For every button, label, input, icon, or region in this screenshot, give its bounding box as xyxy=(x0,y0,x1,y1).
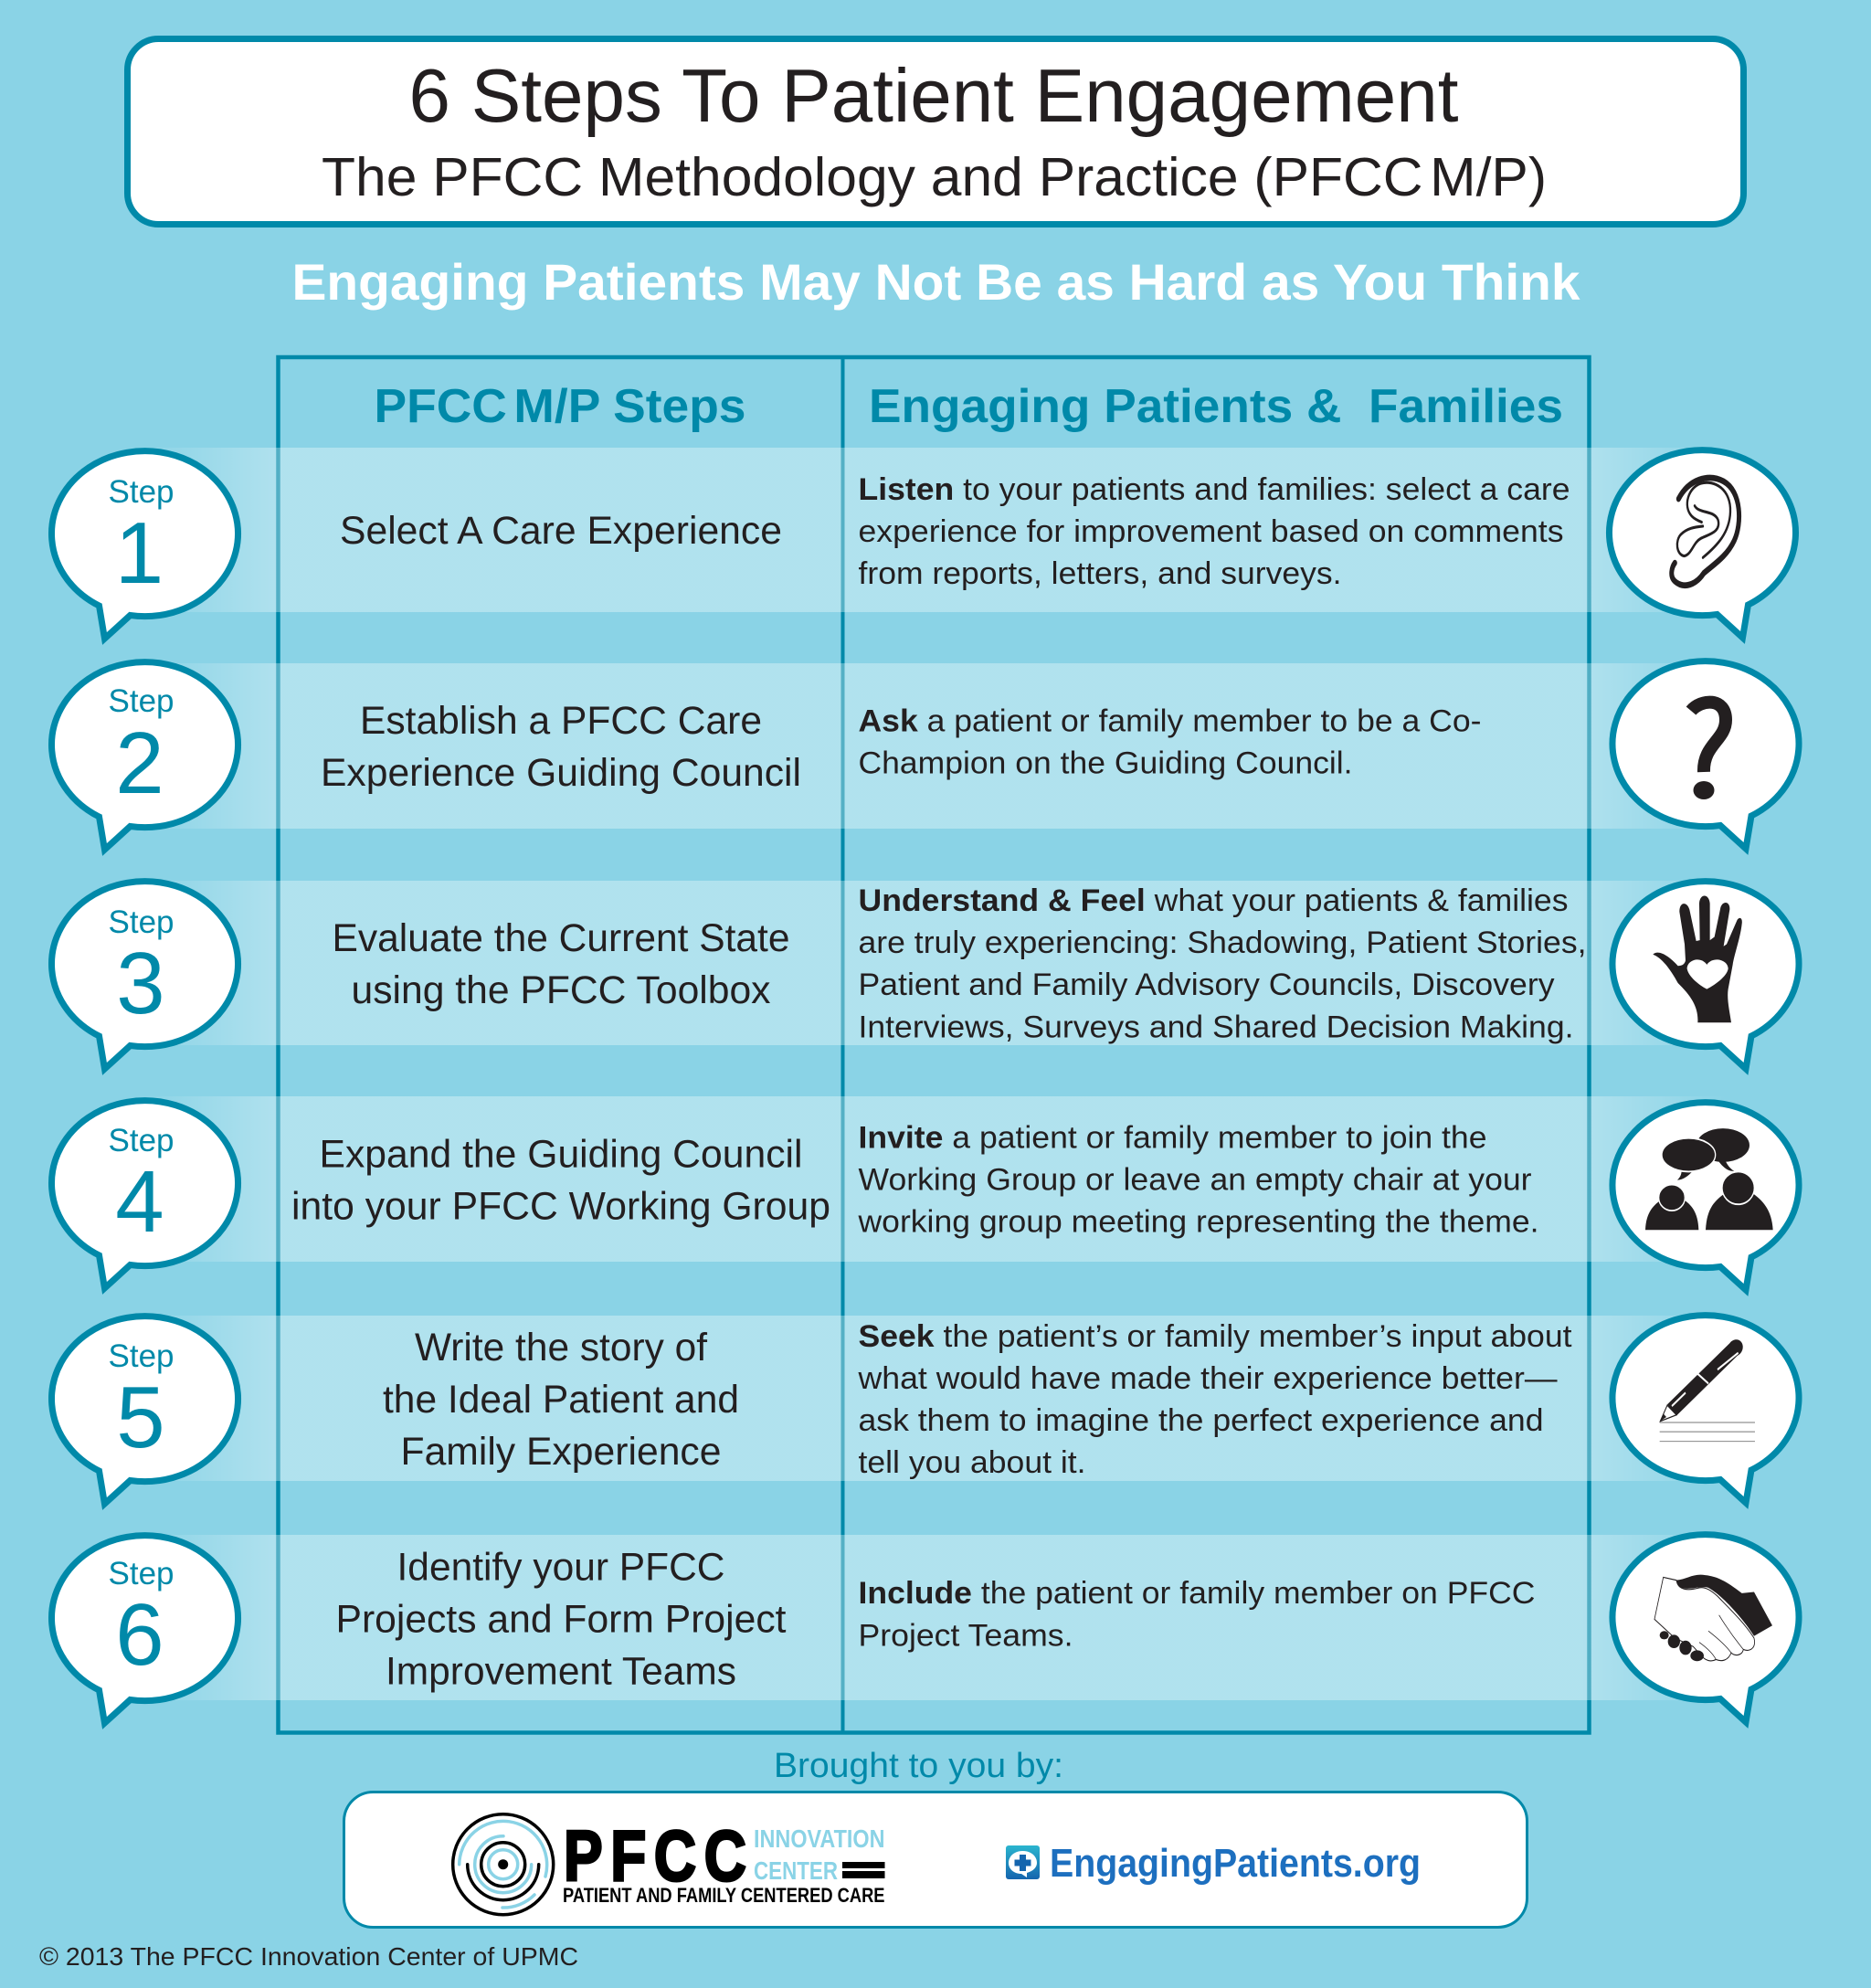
step name: Projects and Form Project xyxy=(336,1597,787,1641)
step bubble 5: Step xyxy=(108,1338,174,1374)
step name: Expand the Guiding Council xyxy=(320,1133,802,1177)
column heading: Engaging Patients and Families: Engaging Patients & Families xyxy=(869,380,1563,433)
row band xyxy=(137,1316,1727,1481)
step description: Understand & Feel what your patients & families xyxy=(859,883,1568,918)
step description: working group meeting representing the theme. xyxy=(857,1204,1538,1239)
brought to you by label: Brought to you by: xyxy=(774,1747,1063,1785)
step name xyxy=(333,916,789,1012)
row: step 6 xyxy=(52,1535,1799,1723)
step description: tell you about it. xyxy=(859,1445,1085,1480)
step description: what would have made their experience better— xyxy=(857,1361,1557,1396)
icon bubble: ear xyxy=(1609,450,1795,638)
row: step 1 xyxy=(52,448,1795,639)
logo: innovation: INNOVATION xyxy=(754,1824,884,1853)
sponsor panel xyxy=(344,1792,1527,1928)
icon bubble: question mark xyxy=(1612,661,1799,849)
step description xyxy=(859,472,1570,591)
step name: Write the story of xyxy=(415,1326,708,1369)
step description: Working Group or leave an empty chair at your xyxy=(859,1162,1531,1197)
row: step 5 xyxy=(52,1316,1799,1504)
step bubble 4: Step xyxy=(108,1123,174,1158)
step description: Ask a patient or family member to be a Co- xyxy=(859,703,1482,738)
step bubble 1: Step xyxy=(108,474,174,510)
row band xyxy=(137,663,1727,829)
step description: Champion on the Guiding Council. xyxy=(859,746,1352,780)
step bubble 5 xyxy=(52,1317,238,1504)
step bubble 2: 2 xyxy=(115,714,164,812)
logo: tagline: PATIENT AND FAMILY CENTERED CARE xyxy=(563,1884,884,1907)
subtitle: The PFCC Methodology and Practice (PFCC M/P) xyxy=(322,147,1547,207)
title box xyxy=(128,38,1743,225)
step description: experience for improvement based on comments xyxy=(859,514,1564,549)
icon bubble: hand with heart xyxy=(1612,882,1799,1069)
row: step 3 xyxy=(52,881,1799,1069)
logo: equals bars xyxy=(842,1862,884,1878)
title: 6 Steps To Patient Engagement xyxy=(409,53,1458,138)
step description: Listen to your patients and families: select a care xyxy=(859,472,1570,507)
step description: Patient and Family Advisory Councils, Discovery xyxy=(859,968,1555,1002)
step bubble 4: 4 xyxy=(115,1153,164,1251)
step name: Improvement Teams xyxy=(386,1650,736,1694)
step bubble 3: Step xyxy=(108,904,174,940)
step bubble 2 xyxy=(52,662,238,850)
step bubble 6: 6 xyxy=(115,1586,164,1684)
icon bubble: pen and lines xyxy=(1612,1316,1799,1503)
step description xyxy=(857,1120,1538,1239)
step name: Experience Guiding Council xyxy=(321,751,801,795)
column heading: PFCC M/P Steps: PFCC M/P Steps xyxy=(375,380,745,433)
step name: Select A Care Experience xyxy=(340,509,782,553)
step bubble 6 xyxy=(52,1536,238,1723)
step description: Invite a patient or family member to join the xyxy=(859,1120,1487,1155)
step bubble 1: 1 xyxy=(115,504,164,602)
logo: PFCC spiral mark xyxy=(453,1814,554,1915)
step bubble 6: Step xyxy=(108,1556,174,1591)
step description: are truly experiencing: Shadowing, Patient Stories, xyxy=(859,925,1586,960)
step bubble 1 xyxy=(52,451,238,639)
row band xyxy=(137,1096,1727,1262)
logo: PFCC wordmark: PFCC xyxy=(564,1816,755,1896)
copyright: © 2013 The PFCC Innovation Center of UPMC xyxy=(39,1942,578,1971)
step description xyxy=(857,1319,1572,1480)
step bubble 3 xyxy=(52,882,238,1069)
logo: center: CENTER xyxy=(754,1856,838,1885)
step description: from reports, letters, and surveys. xyxy=(859,556,1341,591)
row band xyxy=(137,881,1727,1045)
step name: into your PFCC Working Group xyxy=(291,1184,830,1228)
table frame xyxy=(278,357,1590,1732)
logo: EngagingPatients icon xyxy=(1006,1845,1040,1879)
step name xyxy=(383,1326,739,1474)
step description: Project Teams. xyxy=(859,1619,1073,1654)
row band xyxy=(137,448,1727,612)
row: step 4 xyxy=(52,1096,1799,1290)
row: step 2 xyxy=(52,661,1799,850)
step name xyxy=(336,1546,787,1694)
step name: using the PFCC Toolbox xyxy=(351,968,771,1012)
logo: EngagingPatients.org wordmark: EngagingPatients.org xyxy=(1050,1841,1421,1886)
step bubble 4 xyxy=(52,1101,238,1288)
step bubble 3: 3 xyxy=(116,935,165,1032)
step description xyxy=(859,883,1586,1045)
step name xyxy=(291,1133,830,1228)
step bubble 2: Step xyxy=(108,683,174,719)
icon bubble: handshake xyxy=(1612,1535,1799,1722)
step description: ask them to imagine the perfect experience and xyxy=(859,1403,1544,1438)
step name xyxy=(321,699,801,795)
step description: Interviews, Surveys and Shared Decision Making. xyxy=(859,1010,1573,1045)
row band xyxy=(137,1535,1727,1700)
tagline: Engaging Patients May Not Be as Hard as You Think xyxy=(292,253,1580,311)
icon bubble: two people talking xyxy=(1612,1103,1799,1290)
step bubble 5: 5 xyxy=(116,1369,165,1466)
step name: Establish a PFCC Care xyxy=(360,699,762,743)
step description: Include the patient or family member on PFCC xyxy=(859,1576,1535,1611)
step name: the Ideal Patient and xyxy=(383,1378,739,1422)
step description: Seek the patient’s or family member’s input about xyxy=(859,1319,1572,1354)
step name: Family Experience xyxy=(400,1430,722,1474)
step name: Identify your PFCC xyxy=(396,1546,725,1590)
step description xyxy=(859,1576,1535,1654)
step name: Evaluate the Current State xyxy=(333,916,789,960)
step description xyxy=(859,703,1482,780)
